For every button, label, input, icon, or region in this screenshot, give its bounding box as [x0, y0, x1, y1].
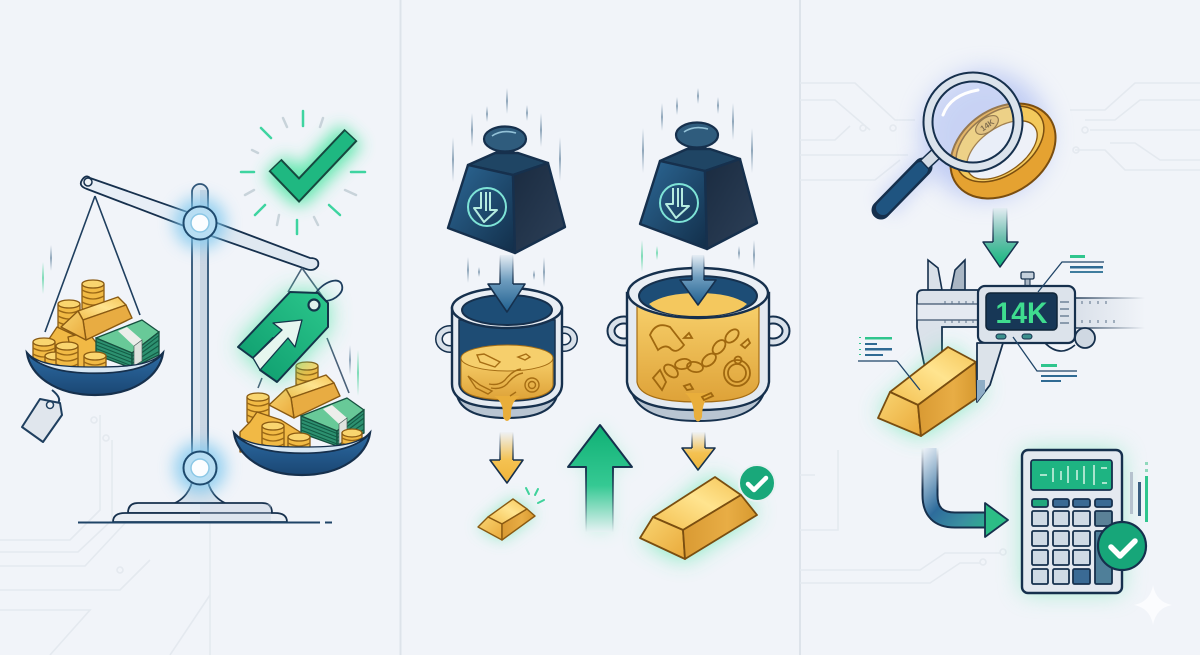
icon: right pile of gold and cash	[240, 362, 364, 465]
panel: melting pots	[439, 88, 786, 560]
icon: beam	[81, 176, 318, 270]
icon: large pot	[611, 268, 786, 422]
calculator screen	[1031, 460, 1112, 490]
icon: badge	[739, 465, 775, 501]
arrow: green increase arrow	[568, 425, 632, 532]
icon: large weight	[640, 122, 757, 249]
arrow: blue arrow into large pot	[680, 255, 716, 305]
arrow: gold arrow from large pot	[682, 432, 715, 470]
icon: calculator	[1022, 450, 1146, 593]
icon: lower hub	[174, 442, 226, 494]
icon: magnifier over ring	[881, 71, 1074, 218]
icon: left pile of gold and cash	[33, 280, 159, 384]
icon: green price tag with arrow	[238, 281, 342, 382]
icon: left falling lines	[452, 88, 561, 287]
panel: measuring	[858, 71, 1172, 625]
icon: caliper annotations	[858, 255, 1104, 382]
icon: check mark with rays	[241, 111, 365, 234]
icon: side bars	[1130, 462, 1148, 522]
icon: gold bar	[878, 343, 1003, 437]
decorative fall lines right	[349, 345, 359, 396]
icon: ring	[932, 84, 1074, 218]
calculator check badge	[1098, 522, 1146, 570]
icon: balance post and base	[78, 184, 332, 522]
arrow: bent arrow to calculator	[930, 448, 1008, 537]
icon: upper hub	[174, 197, 226, 249]
icon: small gold bar	[478, 488, 544, 540]
arrow: green down arrow	[983, 208, 1018, 267]
icon: right falling lines	[641, 88, 755, 272]
icon: left pan	[27, 353, 163, 395]
icon: large gold bar with badge	[640, 465, 775, 560]
panel: balance scale	[22, 111, 370, 522]
icon: caliper	[917, 260, 1145, 368]
arrow: blue arrow into small pot	[488, 255, 525, 312]
icon: right pan	[234, 433, 370, 475]
decorative fall lines left	[42, 245, 52, 294]
icon: right strings	[258, 268, 349, 393]
icon: ring: 14K	[979, 117, 996, 133]
icon: small weight	[448, 126, 565, 253]
icon: grey price tag	[22, 390, 62, 442]
arrow: gold arrow from small pot	[490, 432, 523, 483]
text: 14K display: 14K	[996, 297, 1048, 330]
icon: small pot	[439, 288, 574, 421]
icon: strings left	[45, 196, 140, 332]
icon: sparkle	[1134, 585, 1172, 625]
